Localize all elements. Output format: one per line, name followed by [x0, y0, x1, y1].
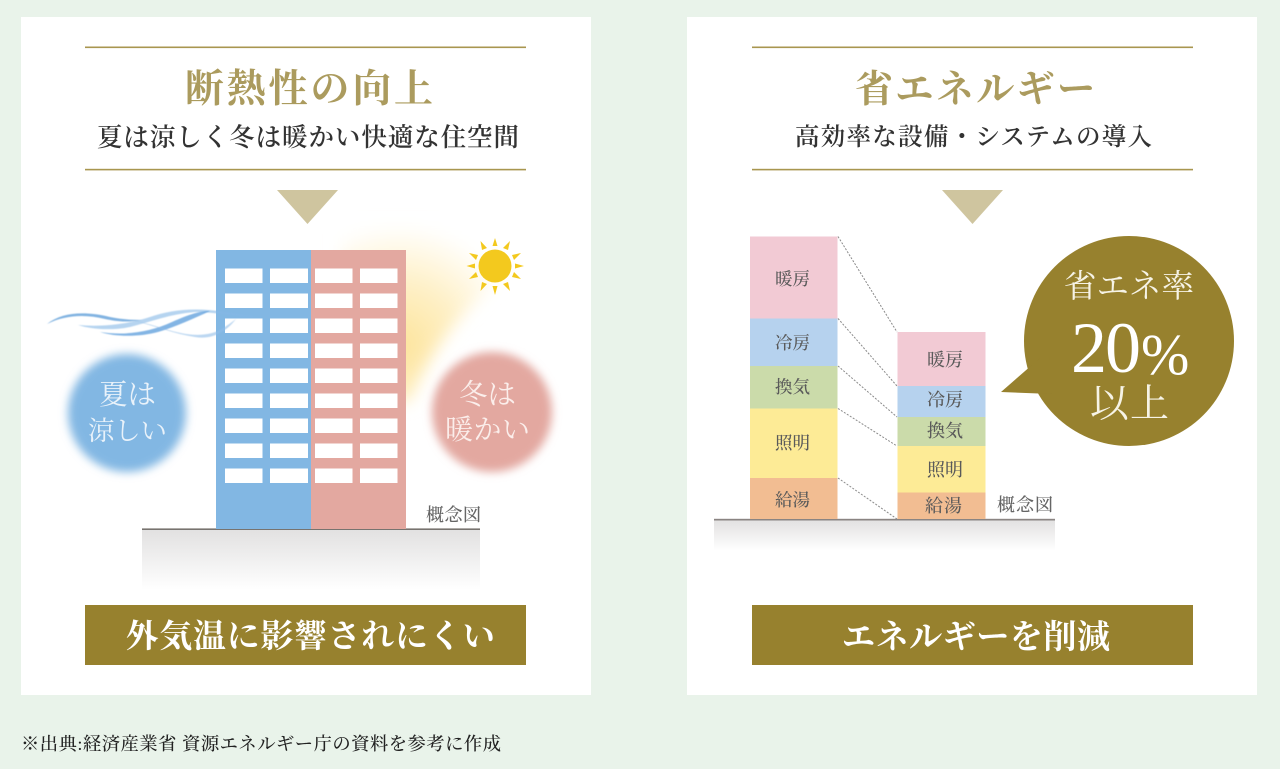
- subheading: insulation: 夏は涼しく冬は暖かい快適な住空間: [97, 123, 519, 152]
- banner: unaffected by outdoor temperature: 外気温に影響されにくい: [126, 618, 495, 655]
- callout: warm in winter: [432, 352, 552, 472]
- ground: [714, 519, 1055, 551]
- source note: ※出典:経済産業省 資源エネルギー庁の資料を参考に作成: [21, 734, 501, 754]
- banner: unaffected by outdoor temperature: [85, 605, 526, 665]
- callout: energy saving rate: 以上: [1090, 383, 1169, 426]
- callout: cool in summer: [68, 354, 186, 472]
- callout: cool in summer: 夏は: [99, 380, 156, 411]
- chart: energy use before: 給湯: [775, 490, 810, 510]
- banner: reduce energy: エネルギーを削減: [842, 619, 1110, 656]
- arrow: down triangle: [942, 190, 1003, 224]
- callout: energy saving rate: 20: [1071, 308, 1141, 388]
- callout: energy saving rate: %: [1141, 322, 1189, 387]
- sunlight glow: [340, 228, 505, 402]
- chart: connector lines: [838, 236, 897, 519]
- heading: insulation: 断熱性の向上: [185, 68, 433, 111]
- chart: energy use before: 冷房: [775, 333, 810, 353]
- panel: energy saving: [687, 17, 1257, 695]
- callout: energy saving rate: [1001, 236, 1234, 446]
- callout: cool in summer: 涼しい: [88, 416, 167, 446]
- chart: energy use before: [750, 236, 838, 519]
- icon: sun: [466, 238, 524, 295]
- illustration: building: [216, 250, 406, 529]
- callout: warm in winter: 暖かい: [445, 414, 530, 446]
- chart: energy use after: 暖房: [927, 350, 963, 370]
- callout: energy saving rate: 省エネ率: [1064, 268, 1194, 305]
- icon: wind: [47, 310, 258, 338]
- chart: energy use after: 換気: [927, 421, 963, 441]
- subheading: energy saving: 高効率な設備・システムの導入: [795, 123, 1152, 151]
- caption: concept diagram: 概念図: [997, 495, 1053, 515]
- chart: energy use after: 冷房: [927, 390, 963, 410]
- chart: energy use before: 暖房: [775, 269, 810, 289]
- caption: concept diagram: 概念図: [426, 505, 481, 525]
- chart: energy use before: 照明: [775, 433, 810, 453]
- chart: energy use after: 照明: [927, 460, 963, 480]
- heading: energy saving: 省エネルギー: [855, 69, 1095, 111]
- chart: energy use after: 給湯: [925, 496, 962, 516]
- chart: energy use before: 換気: [775, 377, 810, 397]
- chart: energy use after: [898, 332, 986, 519]
- banner: reduce energy: [752, 605, 1193, 665]
- arrow: down triangle: [277, 190, 338, 224]
- ground: [142, 528, 480, 590]
- panel: insulation: [21, 17, 591, 695]
- callout: warm in winter: 冬は: [459, 379, 516, 411]
